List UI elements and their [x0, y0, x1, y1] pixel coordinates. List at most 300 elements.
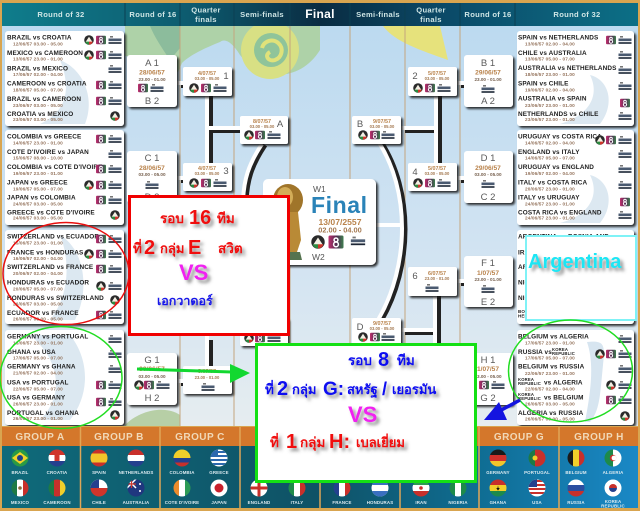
match box: C1 vs D2: 28/06/57 [139, 165, 165, 172]
match row [518, 65, 632, 77]
flag: Netherlands [128, 450, 144, 466]
match row: 21/06/57 02.00 - 04.00 [13, 370, 63, 376]
header bar: Round of 16 [464, 10, 512, 19]
panel: group F matches (mostly covered): ARGENTINA [518, 264, 557, 271]
match row: BELGIUM vs ALGERIA [518, 334, 589, 340]
match row [7, 194, 122, 206]
callout: round of 8 green box: ทีม [397, 353, 415, 368]
match row [7, 380, 122, 392]
callout: round of 8 green box: VS [348, 402, 377, 427]
match box: F1 vs E2: E 2 [481, 297, 495, 308]
group H [565, 432, 625, 508]
match row: 16/06/57 23.00 - 01.00 [13, 340, 63, 346]
flag: Germany [490, 450, 506, 466]
match row: 17/06/57 23.00 - 01.00 [525, 340, 575, 346]
panel: group F matches (mostly covered): NIGERIA [518, 295, 546, 302]
semi-final box D: 03.00 - 05.00 [370, 326, 395, 331]
flag: Ghana [490, 480, 506, 496]
quarter-final box 2: 5/07/57 [428, 71, 446, 77]
match box: B1 vs A2: 29/06/57 [475, 70, 501, 76]
quarter-final box 6: 6 [412, 271, 418, 282]
panel: group H matches [517, 330, 634, 425]
group G [486, 432, 550, 505]
match row: 15/06/57 08.00 - 10.00 [13, 156, 63, 160]
match row [518, 194, 630, 206]
annotation circle: red around group E [3, 222, 129, 324]
header bar: Round of 16 [129, 10, 177, 19]
header bar: Semi-finals [356, 10, 400, 19]
flag: Croatia [48, 450, 66, 466]
match row [7, 149, 122, 160]
callout: round of 8 green box: 2 [277, 378, 288, 400]
panel: group F matches (mostly covered): BOSNIA [518, 309, 537, 314]
match row: 17/06/57 02.00 - 04.00 [13, 72, 63, 77]
header bar: Round of 32 [37, 10, 85, 19]
match box: A1 vs B2: 23.00 - 01.00 [138, 77, 166, 82]
match row: COLOMBIA vs GREECE [7, 134, 82, 140]
match row [7, 164, 122, 176]
match row: 14/06/57 23.00 - 01.00 [13, 140, 63, 146]
match row: 12/06/57 03.00 - 05.00 [13, 42, 63, 46]
header bar: Quarter [416, 6, 446, 14]
quarter-final box 4: 5/07/57 [428, 166, 446, 172]
panel: group F matches (mostly covered): HERZ [518, 314, 531, 318]
group C: JAPAN [211, 500, 227, 505]
group A: CROATIA [47, 470, 68, 475]
callout: round of 16 red box: 16 [189, 207, 211, 229]
match row: AUSTRALIA vs SPAIN [518, 96, 587, 102]
match row: vs BELGIUM [544, 394, 584, 402]
match row: 24/06/57 23.00 - 01.00 [525, 216, 575, 220]
match box: C1 vs D2: C 1 [145, 153, 159, 164]
callout: round of 8 green box: 1 [286, 431, 297, 453]
match box: A1 vs B2: B 2 [145, 96, 159, 107]
match row: vs ALGERIA [544, 380, 583, 386]
match row: KOREA [518, 377, 534, 382]
match row [518, 180, 632, 192]
match row [7, 310, 122, 322]
panel: group G matches [5, 330, 124, 425]
panel: group F matches (mostly covered): IRAN [518, 250, 534, 256]
flag: Mexico [12, 480, 28, 496]
group F: NIGERIA [448, 500, 468, 505]
match row: COSTA RICA vs ENGLAND [518, 210, 602, 216]
callout: Argentina cyan box: Argentina [528, 251, 622, 273]
quarter-final box 7: 5/07/57 [198, 369, 216, 375]
callout: round of 8 green box: สหรัฐ [347, 382, 378, 399]
match row: 15/06/57 23.00 - 01.00 [13, 240, 63, 246]
match row [7, 334, 122, 346]
quarter-final box 3: 3 [223, 166, 229, 177]
match row: RUSSIA vs [518, 349, 552, 356]
callout: round of 8 green box: กลุ่ม [292, 382, 316, 398]
flag: Nigeria [450, 483, 466, 496]
callout: round of 16 red box: รอบ [160, 211, 184, 226]
header bar: Semi-finals [240, 10, 284, 19]
match row [518, 392, 632, 406]
match row: 14/06/57 02.00 - 04.00 [525, 140, 575, 146]
match row: ITALY vs COSTA RICA [518, 180, 588, 186]
group G: USA [532, 500, 543, 505]
final match box: W2 [312, 252, 325, 262]
match row: GERMANY vs GHANA [7, 364, 76, 370]
final match box: 13/07/2557 [318, 217, 362, 227]
match row: GREECE vs COTE D'IVOIRE [7, 210, 95, 216]
flag: Cote d'Ivoire [174, 480, 190, 496]
callout: round of 8 green box: 8 [378, 349, 389, 371]
match box: C1 vs D2 [127, 151, 177, 203]
group A: BRAZIL [12, 470, 29, 475]
quarter-final box 2: 2 [412, 71, 418, 82]
header bar: finals [195, 15, 217, 24]
group B: SPAIN [92, 470, 106, 475]
match row [518, 80, 632, 92]
match row: 26/06/57 03.00 - 05.00 [525, 402, 575, 406]
match row: 24/06/57 03.00 - 05.00 [13, 202, 63, 206]
match row: URUGUAY vs COSTA RICA [518, 134, 602, 140]
callout: round of 16 red box: ที่ [133, 238, 142, 256]
group F [412, 483, 468, 504]
quarter-final box 1 [183, 67, 232, 96]
match box: D1 vs C2: C 2 [481, 192, 495, 203]
quarter-final box 7 [183, 366, 232, 394]
match row: PORTUGAL vs GHANA [7, 410, 79, 417]
match box: G1 vs H2: G 1 [144, 355, 160, 366]
match row: 18/06/57 23.00 - 01.00 [525, 72, 575, 77]
match row [518, 149, 632, 160]
match row: 23/06/57 23.00 - 01.00 [525, 103, 575, 108]
match box: B1 vs A2: A 2 [481, 96, 495, 107]
group D: ENGLAND [248, 500, 270, 505]
match row: 22/06/57 02.00 - 04.00 [525, 386, 575, 392]
match row: HONDURAS vs ECUADOR [7, 280, 89, 286]
match row: ITALY vs URUGUAY [518, 194, 580, 202]
callout: round of 8 green box: ที่ [265, 379, 274, 397]
flag: Greece [210, 450, 228, 466]
match box: G1 vs H2: 30/06/57 [139, 366, 165, 373]
match box: F1 vs E2 [464, 256, 513, 308]
column dividers [180, 26, 460, 427]
callout: round of 16 red box: เอกวาดอร์ [157, 293, 213, 308]
match row: 24/06/57 23.00 - 01.00 [525, 202, 575, 206]
match row: SPAIN vs CHILE [518, 80, 569, 88]
icon: world cup trophy [272, 184, 303, 260]
match row: NETHERLANDS vs CHILE [518, 111, 599, 118]
match row: 19/06/57 02.00 - 04.00 [525, 171, 575, 176]
match row: 22/06/57 23.00 - 01.00 [525, 371, 575, 376]
group A: CAMEROON [43, 500, 71, 505]
match row: 23/06/57 03.00 - 05.00 [13, 117, 63, 122]
group B: AUSTRALIA [123, 500, 150, 505]
group H: REPUBLIC [601, 504, 625, 508]
flag: Brazil [12, 450, 28, 466]
match row [7, 80, 122, 92]
match row: 26/06/57 23.00 - 01.00 [13, 416, 63, 421]
semi-final box A: A [277, 119, 284, 130]
match row: CHILE vs AUSTRALIA [518, 50, 587, 57]
match box: H1 vs G2 [464, 353, 513, 405]
match row [7, 234, 122, 246]
flag: Algeria [604, 450, 622, 466]
flag: Colombia [174, 450, 190, 466]
match row: REPUBLIC [552, 351, 575, 356]
match box: B1 vs A2: 23.00 - 01.00 [474, 77, 502, 82]
group D: GROUP D [255, 432, 305, 443]
match row: 17/06/57 05.00 - 07.00 [13, 356, 63, 360]
flag: Chile [90, 480, 108, 496]
flag: Russia [568, 480, 584, 496]
match box: C1 vs D2: D 2 [145, 192, 159, 203]
match row [518, 377, 632, 392]
semi-final box B: 03.00 - 05.00 [370, 124, 395, 129]
match row: COLOMBIA vs COTE D'IVOIRE [7, 164, 103, 171]
match row [7, 264, 122, 276]
group C: GROUP C [175, 432, 225, 443]
match row: CROATIA vs MEXICO [7, 111, 73, 118]
group A: GROUP A [15, 432, 65, 443]
flag: Portugal [528, 450, 546, 466]
match row: JAPAN vs COLOMBIA [7, 194, 76, 202]
flag: Japan [210, 480, 228, 496]
group A [11, 432, 71, 505]
match row: AUSTRALIA vs NETHERLANDS [518, 65, 617, 72]
group C: COLOMBIA [169, 470, 195, 475]
group C [165, 432, 229, 505]
semi-final box D [352, 318, 401, 346]
final match box: Final [311, 192, 368, 218]
group H: ALGERIA [603, 470, 624, 475]
match row [518, 164, 632, 176]
match row: REPUBLIC [518, 381, 541, 386]
arrow: green pointing to round of 8 box [137, 364, 250, 383]
callout: round of 16 red box: ทีม [217, 211, 235, 226]
match row: BELGIUM vs RUSSIA [518, 364, 585, 370]
match row [518, 134, 632, 146]
panel: group C matches [5, 130, 124, 225]
match row [518, 96, 630, 108]
group G: GROUP G [494, 432, 544, 443]
match box: H1 vs G2: 03.00 - 05.00 [474, 374, 502, 379]
callout: round of 16 red box: VS [179, 260, 208, 285]
match box: G1 vs H2: H 2 [145, 393, 159, 404]
group E: FRANCE [332, 500, 352, 505]
semi-final box B: B [357, 119, 363, 130]
match row [7, 249, 122, 261]
match row: REPUBLIC [518, 396, 541, 401]
match row: URUGUAY vs ENGLAND [518, 164, 594, 171]
match box: H1 vs G2: H 1 [481, 355, 495, 366]
match row: 20/06/57 02.00 - 04.00 [13, 271, 63, 276]
group D: ITALY [291, 500, 303, 505]
callout: round of 16 red box: E [188, 237, 201, 259]
match row: 18/06/57 05.00 - 07.00 [13, 88, 63, 92]
match row: 17/06/57 05.00 - 07.00 [525, 356, 575, 360]
group G: GERMANY [486, 470, 510, 475]
final match box: 02.00 - 04.00 [318, 226, 362, 234]
match row: 22/06/57 05.00 - 07.00 [13, 386, 63, 392]
callout: round of 8 green box: / [382, 379, 387, 399]
callout: round of 16 red box: 2 [144, 237, 155, 259]
quarter-final box 3: 03.00 - 05.00 [195, 171, 220, 176]
match row: FRANCE vs HONDURAS [7, 250, 84, 256]
callout: round of 8 green box: H: [329, 431, 350, 453]
final match box [263, 179, 376, 265]
callout: round of 16 red box: กลุ่ม [160, 241, 184, 257]
header bar: Final [305, 7, 335, 21]
semi-final box B: 9/07/57 [373, 119, 391, 125]
callout: round of 8 green box: เบลเยี่ยม [356, 433, 405, 450]
callout: round of 8 green box: รอบ [348, 353, 372, 368]
group G: PORTUGAL [524, 470, 550, 475]
match box: D1 vs C2: D 1 [481, 153, 495, 164]
match row: CAMEROON vs CROATIA [7, 80, 87, 88]
match row [7, 34, 122, 46]
quarter-final box 4 [408, 163, 457, 191]
match box: A1 vs B2: A 1 [145, 58, 159, 69]
match row: ALGERIA vs RUSSIA [518, 410, 584, 417]
flag: Korea Republic [604, 480, 622, 496]
quarter-final box 1: 03.00 - 05.00 [195, 76, 220, 81]
bracket connector lines [177, 83, 468, 384]
semi-final box D: D [357, 322, 364, 333]
match row: 26/06/57 03.00 - 05.00 [13, 302, 63, 306]
header bar: Round of 32 [553, 10, 601, 19]
match row: 16/06/57 02.00 - 04.00 [13, 256, 63, 261]
quarter-final box 7: 23.00 - 01.00 [195, 375, 220, 380]
match row: 13/06/57 02.00 - 04.00 [525, 42, 575, 46]
callout: round of 8 green box [256, 344, 476, 482]
group G: GHANA [490, 500, 507, 505]
callout: round of 16 red box [130, 196, 288, 334]
group C: GREECE [209, 470, 229, 475]
quarter-final box 4: 03.00 - 05.00 [425, 171, 450, 176]
match row [7, 364, 122, 376]
quarter-final box 4: 4 [412, 167, 418, 178]
group F: IRAN [415, 500, 427, 505]
match row [7, 280, 122, 292]
quarter-final box 6: 23.00 - 01.00 [425, 276, 450, 281]
match row: 26/06/57 03.00 - 05.00 [525, 416, 575, 422]
match box: C1 vs D2: 03.00 - 05.00 [138, 172, 166, 177]
flag: Iran [412, 483, 430, 496]
match row: 19/06/57 02.00 - 04.00 [525, 88, 575, 92]
match row: 20/06/57 23.00 - 01.00 [525, 186, 575, 192]
match row: 26/06/57 23.00 - 01.00 [13, 402, 63, 406]
quarter-final box 2: 03.00 - 05.00 [425, 76, 450, 81]
panel: group E matches [5, 230, 124, 324]
flag: Cameroon [48, 480, 66, 496]
callout: round of 8 green box: ที่ [270, 432, 279, 450]
match row: KOREA [552, 347, 568, 352]
match row [7, 96, 122, 108]
group H: KOREA [605, 499, 622, 504]
match box: F1 vs E2: 23.00 - 01.00 [474, 277, 502, 282]
match row [518, 410, 630, 422]
match row [7, 64, 122, 77]
match row [518, 111, 632, 122]
match box: D1 vs C2: 03.00 - 05.00 [474, 172, 502, 177]
match row [518, 334, 632, 346]
match row: ENGLAND vs ITALY [518, 149, 580, 156]
match box: D1 vs C2: 29/06/57 [475, 165, 501, 172]
match box: H1 vs G2: 1/07/57 [477, 366, 499, 373]
match row: BRAZIL vs CROATIA [7, 34, 72, 42]
semi-final box B [352, 116, 401, 144]
match box: B1 vs A2: B 1 [481, 58, 495, 69]
group B: CHILE [92, 500, 106, 505]
group E [332, 483, 393, 504]
match box: H1 vs G2: G 2 [480, 393, 496, 404]
match row [7, 410, 120, 421]
quarter-final box 1: 4/07/57 [198, 71, 216, 77]
match box: D1 vs C2 [464, 151, 513, 203]
quarter-final box 1: 1 [223, 71, 229, 82]
match row: GERMANY vs PORTUGAL [7, 334, 88, 340]
group H: BELGIUM [565, 470, 587, 475]
match row: USA vs GERMANY [7, 394, 66, 402]
match row: KOREA [518, 392, 534, 397]
callout: round of 8 green box: เยอรมัน [392, 382, 436, 397]
match row: USA vs PORTUGAL [7, 380, 69, 386]
callout: round of 8 green box: G: [323, 379, 344, 400]
semi-final box C [240, 318, 288, 346]
match row [7, 50, 122, 62]
header bar [2, 3, 638, 26]
group B: GROUP B [94, 432, 144, 443]
group flags strip [0, 426, 640, 511]
flag: England [250, 480, 268, 496]
flag: Italy [288, 483, 306, 496]
match row: 23/06/57 03.00 - 05.00 [13, 103, 63, 108]
match row: ECUADOR vs FRANCE [7, 310, 79, 317]
semi-final box D: 9/07/57 [373, 321, 391, 327]
group B: NETHERLANDS [119, 470, 153, 475]
annotation circle: green around group H [508, 320, 632, 422]
flag: Belgium [568, 450, 584, 466]
quarter-final box 6: 6/07/57 [428, 271, 446, 277]
callout: round of 8 green box: กลุ่ม [300, 435, 325, 451]
match row: SWITZERLAND vs FRANCE [7, 264, 94, 271]
match row: 26/06/57 03.00 - 05.00 [13, 316, 63, 322]
match row: 20/06/57 05.00 - 07.00 [13, 286, 63, 292]
semi-final box A: 03.00 - 05.00 [250, 124, 275, 129]
match row: BRAZIL vs CAMEROON [7, 96, 81, 103]
match row: 24/06/57 03.00 - 05.00 [13, 216, 63, 220]
match box: F1 vs E2: F 1 [481, 258, 495, 269]
match row: 19/06/57 23.00 - 01.00 [13, 171, 63, 176]
quarter-final box 2 [408, 67, 457, 96]
final match box: W1 [313, 184, 326, 194]
match row [7, 111, 120, 122]
flag: Spain [90, 450, 108, 466]
match row [7, 295, 120, 306]
match row: 23/06/57 23.00 - 01.00 [525, 117, 575, 122]
annotation circle: green around group G [0, 326, 122, 428]
match row: HONDURAS vs SWITZERLAND [7, 295, 104, 302]
match row: 19/06/57 05.00 - 07.00 [13, 186, 63, 192]
panel: group A matches [5, 31, 124, 126]
match row [7, 349, 122, 360]
panel: group D matches [517, 130, 634, 225]
match row [518, 347, 632, 360]
quarter-final box 3: 4/07/57 [198, 166, 216, 172]
match row: 14/06/57 05.00 - 07.00 [525, 156, 575, 160]
match row: SWITZERLAND vs ECUADOR [7, 234, 99, 240]
match row [518, 34, 632, 46]
match row: MEXICO vs CAMEROON [7, 50, 83, 57]
panel: group B matches [517, 31, 634, 126]
match row [7, 134, 122, 146]
